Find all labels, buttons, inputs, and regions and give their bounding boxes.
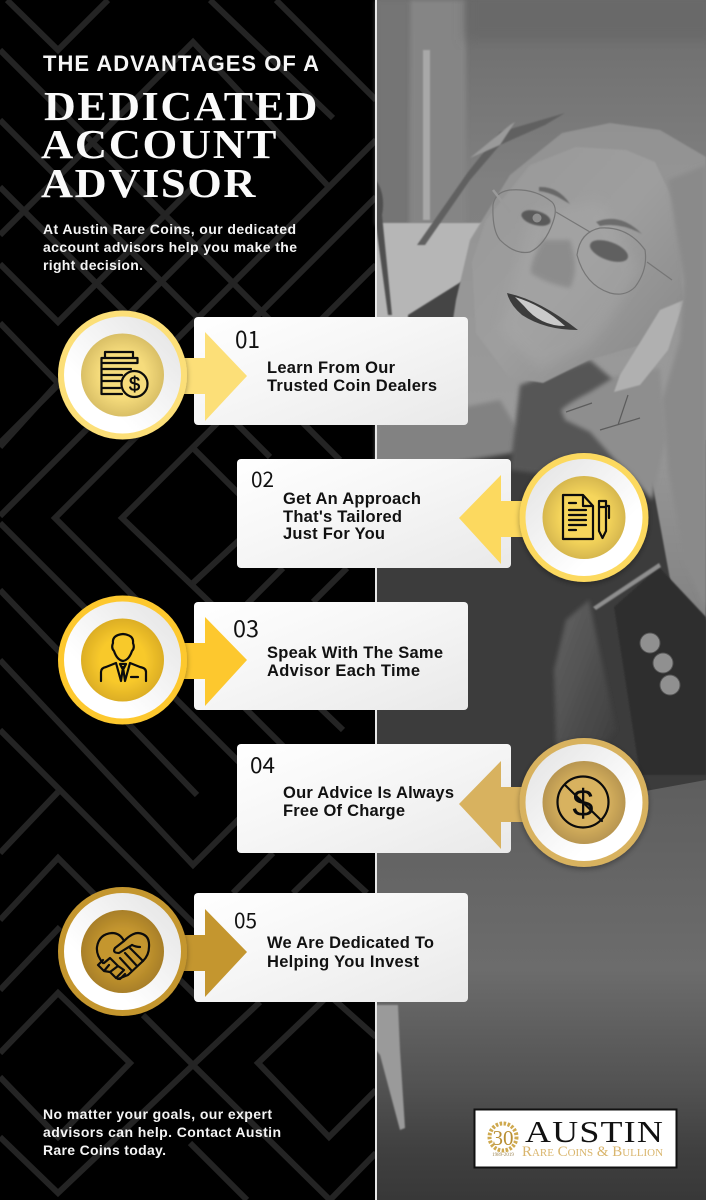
number: 02 <box>251 464 274 494</box>
step 02 <box>237 453 648 582</box>
label: Speak With The Same <box>267 644 443 662</box>
label: Advisor Each Time <box>267 662 420 680</box>
plant <box>417 113 565 245</box>
icon: coin stack: $ <box>129 374 140 396</box>
kicker heading: THE ADVANTAGES OF A <box>43 51 319 76</box>
dark sweater and jacket <box>376 440 706 850</box>
card <box>237 459 511 568</box>
logo frame <box>474 1110 676 1168</box>
number: 04 <box>250 748 275 780</box>
smile <box>507 293 578 330</box>
arrow <box>180 909 247 997</box>
face <box>472 147 683 383</box>
hair right <box>662 165 706 610</box>
phone <box>614 300 684 392</box>
glasses <box>493 190 672 294</box>
nose shadow <box>531 240 575 288</box>
icon: no dollar sign <box>558 776 608 828</box>
header text <box>41 51 319 273</box>
intro paragraph: right decision. <box>43 257 143 273</box>
photo base wall <box>376 0 706 460</box>
medallion <box>58 887 187 1016</box>
arrow <box>459 475 530 564</box>
card <box>237 744 511 853</box>
neck <box>510 360 640 480</box>
label: Our Advice Is Always <box>283 784 454 802</box>
medallion <box>58 310 187 440</box>
arrow <box>459 761 530 849</box>
background photo: woman on phone <box>376 0 706 1200</box>
label <box>267 934 434 971</box>
laptop base edge <box>376 1005 405 1130</box>
tagline: Rare Coins & Bullion <box>522 1144 663 1160</box>
card <box>194 602 468 710</box>
jacket cuff <box>614 567 706 775</box>
label: Get An Approach <box>283 490 421 508</box>
step 04 <box>237 738 648 867</box>
intro paragraph: account advisors help you make the <box>43 239 297 255</box>
anniversary laurel badge <box>490 1124 516 1158</box>
intro paragraph: At Austin Rare Coins, our dedicated <box>43 221 296 237</box>
main title line 1: DEDICATED <box>44 83 319 129</box>
label <box>267 359 437 395</box>
card <box>194 317 468 425</box>
card <box>194 893 468 1002</box>
anniversary laurel badge: 30 <box>492 1126 514 1150</box>
wordmark: AUSTIN <box>525 1114 664 1149</box>
label: Trusted Coin Dealers <box>267 377 437 395</box>
label: Learn From Our <box>267 359 396 377</box>
icon: handshake heart <box>97 933 149 979</box>
label <box>283 490 421 543</box>
icon: no dollar sign: $ <box>572 783 594 825</box>
intro paragraph <box>43 221 297 273</box>
step 05 <box>58 887 468 1016</box>
hair <box>376 123 706 620</box>
anniversary laurel badge: 1989-2019 <box>492 1153 514 1158</box>
medallion <box>520 738 648 867</box>
number: 03 <box>233 610 259 644</box>
arrow <box>180 332 247 421</box>
closing paragraph <box>43 1106 281 1158</box>
step 01 <box>58 310 468 440</box>
label: Just For You <box>283 525 385 543</box>
number: 05 <box>234 905 257 935</box>
eyebrows <box>539 187 570 204</box>
label: We Are Dedicated To <box>267 934 434 952</box>
center vertical divider <box>375 0 377 1200</box>
white furniture <box>376 223 486 323</box>
closing paragraph: advisors can help. Contact Austin <box>43 1124 281 1140</box>
jacket buttons <box>640 633 680 695</box>
hand <box>561 368 666 500</box>
closing paragraph: No matter your goals, our expert <box>43 1106 272 1122</box>
label <box>283 784 454 820</box>
label: That's Tailored <box>283 508 402 526</box>
main title line 3: ADVISOR <box>41 160 257 206</box>
icon: document and pen <box>563 495 609 539</box>
step 03 <box>58 596 468 724</box>
lapel <box>554 600 616 760</box>
pen <box>593 563 661 610</box>
black background panel <box>0 0 376 1200</box>
laptop <box>376 780 706 1200</box>
eyes <box>520 207 552 229</box>
closing paragraph: Rare Coins today. <box>43 1142 166 1158</box>
medallion <box>520 453 648 582</box>
medallion <box>58 596 187 724</box>
icon: advisor in suit <box>101 634 146 681</box>
main title line 2: ACCOUNT <box>41 121 278 167</box>
label: Free Of Charge <box>283 802 405 820</box>
geometric line pattern <box>0 0 376 1200</box>
logo: Austin Rare Coins & Bullion <box>474 1110 676 1168</box>
icon: coin stack <box>102 352 148 397</box>
label <box>267 644 443 680</box>
arrow <box>180 617 247 706</box>
label: Helping You Invest <box>267 953 420 971</box>
number: 01 <box>235 320 260 355</box>
